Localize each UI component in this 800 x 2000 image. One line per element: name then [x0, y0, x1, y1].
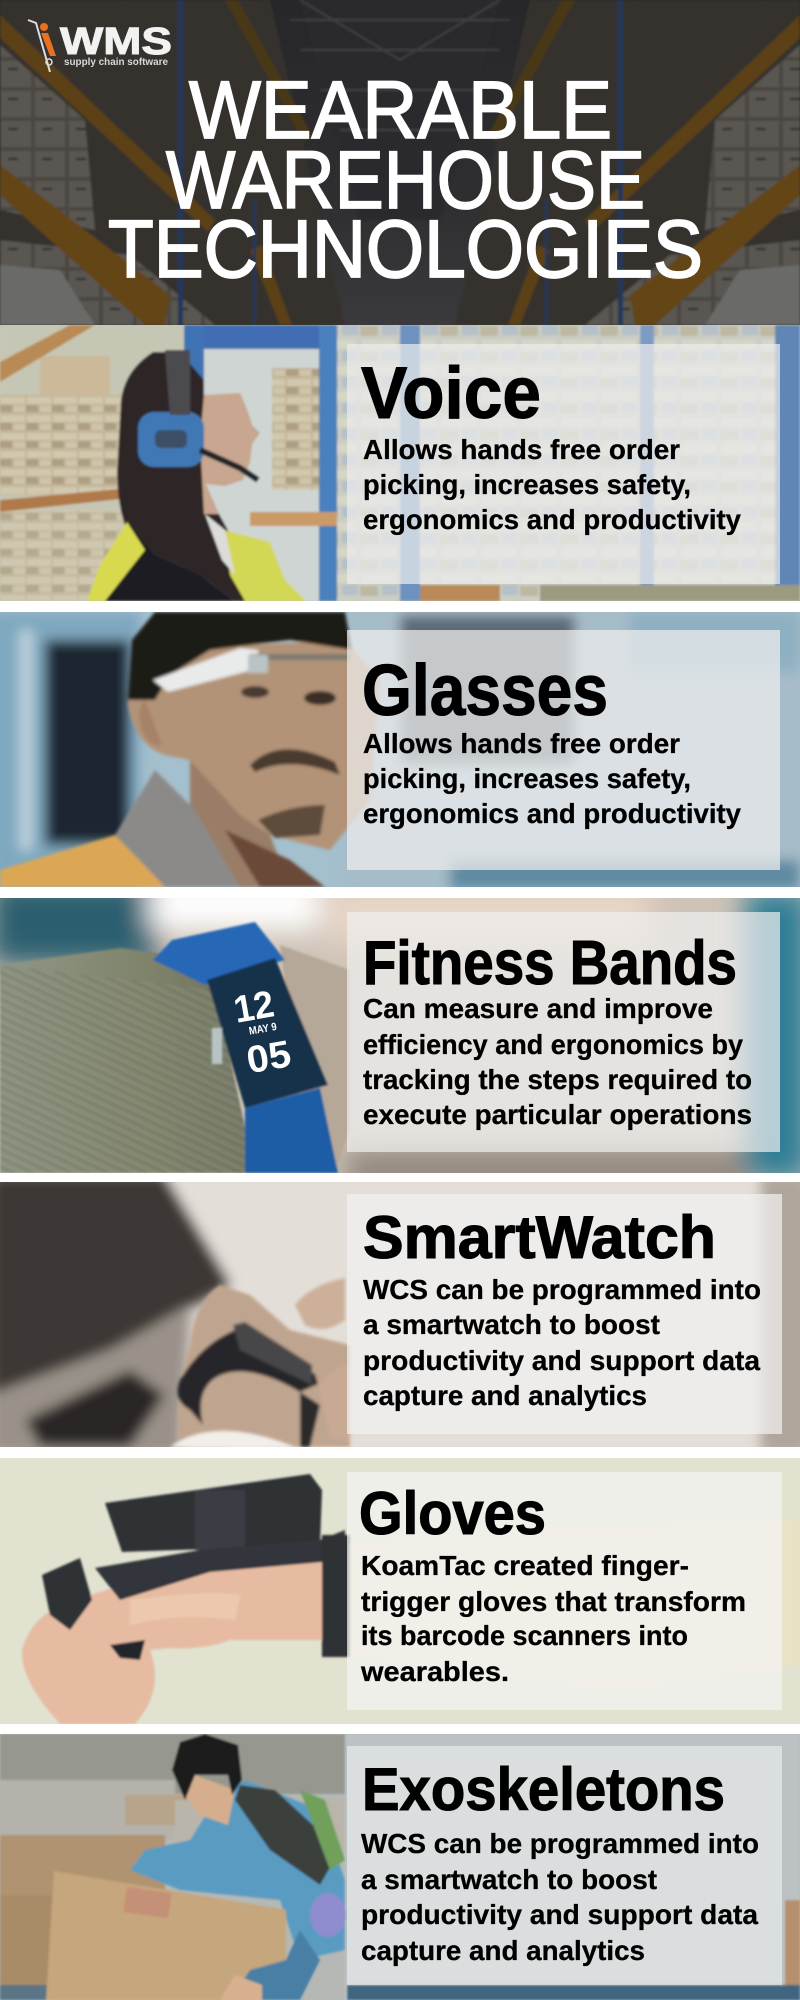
- description: Gloves: wearables.: [360, 1656, 509, 1687]
- description: Gloves: KoamTac created finger-: [361, 1550, 689, 1581]
- description: Fitness Bands: tracking the steps required to: [363, 1064, 752, 1095]
- description: SmartWatch: [363, 1274, 761, 1411]
- description: SmartWatch: a smartwatch to boost: [363, 1309, 660, 1340]
- photo: man wearing smart glasses: [0, 605, 800, 895]
- description: Gloves: its barcode scanners into: [361, 1620, 688, 1651]
- main title: WAREHOUSE: [166, 135, 645, 226]
- logo tagline: supply chain software: [64, 57, 168, 68]
- heading: SmartWatch: SmartWatch: [363, 1204, 716, 1271]
- heading: Exoskeletons: Exoskeletons: [362, 1756, 725, 1823]
- text box: Exoskeletons: [347, 1746, 782, 1985]
- photo: woman with voice headset in warehouse: [0, 325, 800, 601]
- heading: Fitness Bands: Fitness Bands: [363, 929, 737, 998]
- description: SmartWatch: WCS can be programmed into: [363, 1274, 761, 1305]
- panel: Glasses: [0, 605, 800, 895]
- logo: [28, 20, 172, 72]
- description: Gloves: trigger gloves that transform: [361, 1586, 746, 1617]
- main title: [108, 80, 700, 279]
- photo: smartwatch on wrist at laptop: [0, 1175, 800, 1455]
- heading: Voice: Voice: [361, 353, 541, 434]
- description: Exoskeletons: productivity and support data: [361, 1899, 758, 1930]
- description: Exoskeletons: a smartwatch to boost: [361, 1864, 657, 1895]
- band display: time and date: [235, 991, 290, 1072]
- panel: Gloves: [0, 1458, 800, 1724]
- panel: Voice: [0, 325, 800, 601]
- panel: Exoskeletons: [0, 1734, 800, 2000]
- text box: Gloves: [347, 1472, 782, 1710]
- description: Exoskeletons: [361, 1828, 759, 1966]
- main title: TECHNOLOGIES: [108, 204, 703, 295]
- photo: fitness band on wrist: [0, 898, 800, 1173]
- description: Glasses: ergonomics and productivity: [363, 798, 741, 829]
- description: Voice: Allows hands free order: [363, 434, 680, 465]
- photo: worker lifting a box in an exoskeleton: [0, 1734, 800, 2000]
- description: Fitness Bands: efficiency and ergonomics by: [363, 1029, 743, 1060]
- description: Glasses: Allows hands free order: [363, 728, 680, 759]
- main title: WEARABLE: [189, 65, 612, 156]
- description: Glasses: [363, 728, 741, 829]
- band display: time and date: 12: [231, 983, 277, 1032]
- band display: time and date: 05: [244, 1033, 294, 1082]
- description: Exoskeletons: capture and analytics: [361, 1935, 645, 1966]
- photo: finger-trigger glove scanner on hand: [22, 1474, 800, 1724]
- description: SmartWatch: productivity and support data: [363, 1345, 760, 1376]
- description: Fitness Bands: Can measure and improve: [363, 993, 713, 1024]
- header panel: warehouse aisle photo: [0, 0, 800, 325]
- description: Glasses: picking, increases safety,: [363, 763, 691, 794]
- description: Gloves: [360, 1550, 746, 1687]
- description: Voice: picking, increases safety,: [363, 469, 691, 500]
- logo wordmark: WMS: [60, 21, 172, 63]
- heading: Glasses: Glasses: [362, 651, 608, 731]
- band display: time and date: MAY 9: [248, 1021, 278, 1038]
- panel: SmartWatch: [0, 1175, 800, 1455]
- text box: Fitness Bands: [347, 912, 780, 1152]
- description: SmartWatch: capture and analytics: [363, 1380, 647, 1411]
- description: Voice: ergonomics and productivity: [363, 504, 741, 535]
- description: Voice: [363, 434, 741, 535]
- text box: Voice: [347, 344, 780, 584]
- text box: Glasses: [347, 630, 780, 870]
- description: Exoskeletons: WCS can be programmed into: [361, 1828, 759, 1859]
- text box: SmartWatch: [347, 1194, 782, 1434]
- logo icon: hand cart: [28, 20, 56, 72]
- panel: Fitness Bands: [0, 898, 800, 1173]
- description: Fitness Bands: [363, 993, 752, 1130]
- description: Fitness Bands: execute particular operations: [363, 1099, 752, 1130]
- heading: Gloves: Gloves: [359, 1480, 546, 1547]
